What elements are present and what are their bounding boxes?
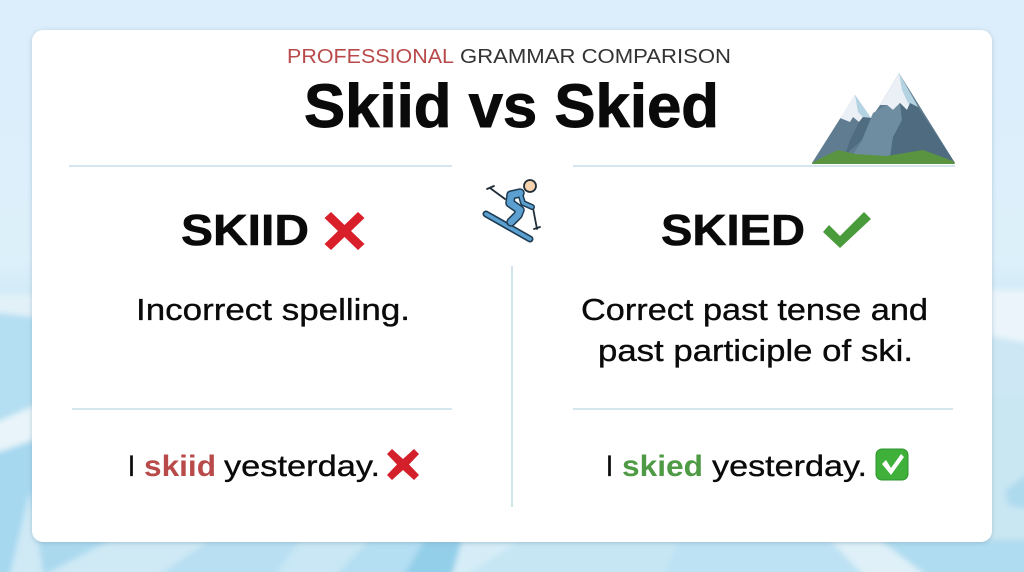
definition text: Correct past tense and [581, 292, 928, 327]
divider lines [69, 166, 955, 507]
example sentence: yesterday. [712, 450, 867, 483]
panel: correct column [581, 206, 928, 483]
eyebrow heading: PROFESSIONAL [287, 46, 454, 68]
icon: red cross [324, 212, 364, 250]
icon: green check [823, 212, 871, 248]
icon: skier [486, 180, 540, 239]
example sentence: yesterday. [224, 450, 380, 483]
eyebrow heading [287, 46, 731, 68]
heading: SKIID: SKIID [181, 206, 309, 255]
heading: SKIED: SKIED [661, 206, 805, 255]
example sentence [128, 449, 419, 483]
definition text: past participle of ski. [598, 333, 913, 368]
example sentence: skied [622, 450, 703, 483]
title: Skiid vs Skied [304, 72, 719, 140]
definition text: Incorrect spelling. [136, 292, 410, 327]
icon: green check box [876, 449, 908, 480]
icon: mountains [812, 73, 955, 164]
example sentence: skiid [144, 450, 216, 483]
eyebrow heading: GRAMMAR COMPARISON [460, 46, 731, 68]
definition text [581, 292, 928, 368]
icon: small red cross [387, 449, 419, 480]
panel: incorrect column [128, 206, 419, 483]
example sentence: I [128, 450, 135, 483]
example sentence [606, 449, 908, 483]
example sentence: I [606, 450, 613, 483]
